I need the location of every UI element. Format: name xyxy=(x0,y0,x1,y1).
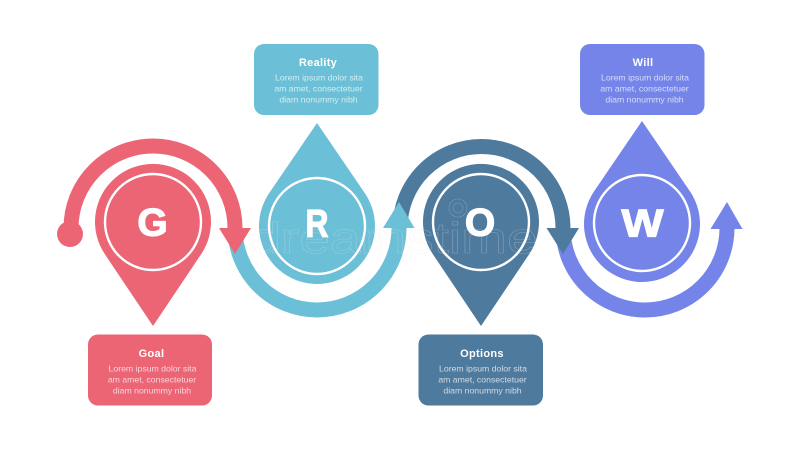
callout: Goal: Goal xyxy=(139,348,164,360)
callout: Options: diam nonummy nibh xyxy=(443,386,522,396)
callout: Options: Lorem ipsum dolor sita xyxy=(439,364,527,374)
callout: Reality: diam nonummy nibh xyxy=(279,94,358,104)
callout: Goal xyxy=(88,334,212,406)
watermark: dreamstime xyxy=(250,214,538,263)
callout: Will: am amet, consectetuer xyxy=(600,84,689,94)
callout: Goal: am amet, consectetuer xyxy=(108,374,196,384)
callout: Reality: Reality xyxy=(299,57,338,69)
panel: Goal pin xyxy=(95,164,211,326)
callout: Reality: Lorem ipsum dolor sita xyxy=(275,72,363,82)
panel: Will drop: W xyxy=(622,202,664,246)
callout: Reality xyxy=(254,44,378,115)
panel: Reality drop: R xyxy=(306,202,328,246)
panel: Options pin xyxy=(423,164,539,326)
callout: Options: Options xyxy=(460,348,504,360)
arrow: Options arc xyxy=(400,146,579,254)
watermark xyxy=(250,199,538,263)
callout: Goal: Lorem ipsum dolor sita xyxy=(109,364,197,374)
arrow: Will arc xyxy=(563,202,742,310)
callout: Options: am amet, consectetuer xyxy=(438,374,527,384)
callout: Reality: am amet, consectetuer xyxy=(274,84,363,94)
callout: Goal: diam nonummy nibh xyxy=(113,386,191,396)
panel: Reality drop xyxy=(259,123,375,284)
callout: Will: Lorem ipsum dolor sita xyxy=(601,72,689,82)
callout: Will: Will xyxy=(633,57,653,69)
panel: Will drop xyxy=(584,121,700,282)
callout: Will xyxy=(580,44,704,115)
panel: Goal pin: G xyxy=(137,202,168,244)
callout: Options xyxy=(418,334,543,406)
panel: Options pin: O xyxy=(465,202,495,244)
callout: Will: diam nonummy nibh xyxy=(605,94,684,104)
arrow: Reality arc xyxy=(235,202,414,310)
arrow: Goal arc xyxy=(57,146,251,254)
